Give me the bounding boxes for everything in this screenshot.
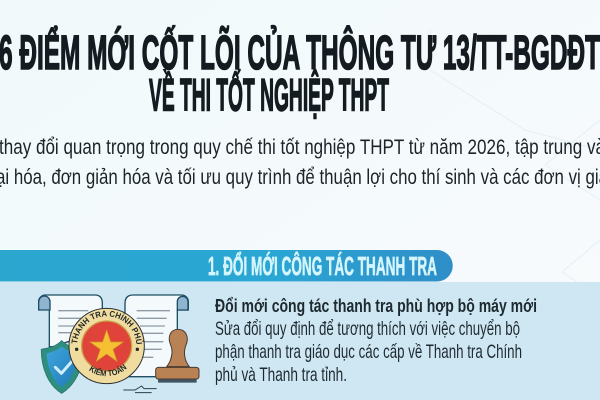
description body xyxy=(215,318,522,386)
description body: phủ và Thanh tra tỉnh. xyxy=(215,364,347,386)
icon: left document xyxy=(39,295,102,347)
panel: section 1 xyxy=(0,282,600,400)
icon: seal: THANH TRA CHÍNH PHỦ xyxy=(71,310,144,344)
icon: right document xyxy=(123,295,188,393)
intro text xyxy=(0,135,600,189)
icon: seal xyxy=(68,308,145,384)
text block: section 1 description xyxy=(215,295,537,386)
icon: inspection seal with documents, shield and stamp xyxy=(38,294,200,394)
icon: seal: KIỂM TOÁN xyxy=(89,364,127,376)
icon: shield xyxy=(41,341,83,393)
title xyxy=(0,25,600,121)
icon: stamp xyxy=(156,329,199,383)
section heading band xyxy=(0,250,453,282)
